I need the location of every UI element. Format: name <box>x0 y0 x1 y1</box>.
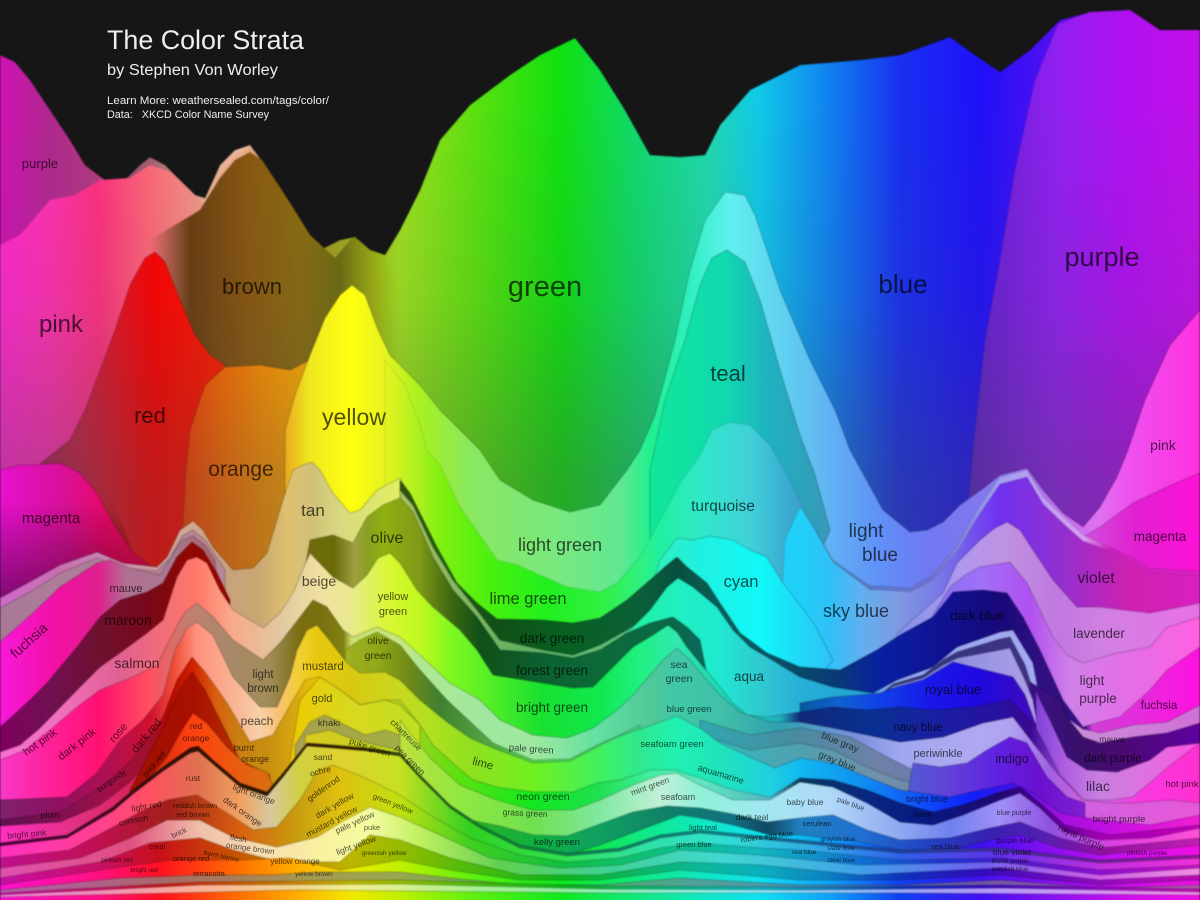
label: dark teal: dark teal <box>736 812 768 822</box>
label: orange of burnt orange: orange <box>241 754 269 764</box>
label: mauve right: mauve <box>1099 734 1125 744</box>
band: teal <box>650 250 830 600</box>
learn more line: Learn More: weathersealed.com/tags/color/ <box>107 95 330 107</box>
band: indigo <box>905 737 1085 830</box>
label: bright red: bright red <box>130 867 158 874</box>
label: robin's egg blue: robin's egg blue <box>740 829 793 844</box>
band: red <box>40 252 225 600</box>
band: orange <box>183 360 310 600</box>
label: seafoam: seafoam <box>661 792 695 802</box>
label: puke green: puke green <box>348 736 392 759</box>
label: crimson: crimson <box>118 812 149 828</box>
label: sand: sand <box>314 752 332 762</box>
band: dark rim line <box>0 743 1200 900</box>
label: rust: rust <box>186 773 201 783</box>
label: royal purple: royal purple <box>1056 822 1106 853</box>
label: light of light brown: light <box>252 669 274 681</box>
band: burnt orange, gold, neon green, navy <box>0 657 1200 900</box>
label: sea: sea <box>671 659 688 671</box>
label: bluish purple: bluish purple <box>992 858 1029 865</box>
label: lime green: lime green <box>489 590 567 608</box>
label: pinkish red: pinkish red <box>101 857 133 864</box>
label: pink: pink <box>39 311 84 338</box>
label: baby blue: baby blue <box>787 797 824 807</box>
label: reddish brown: reddish brown <box>173 803 217 810</box>
band: lilac <box>1036 690 1200 900</box>
label: green of yellow green: green <box>379 606 407 618</box>
label: brown of light brown: brown <box>247 683 279 695</box>
band: bright pink, crimson <box>0 720 195 880</box>
label: aquamarine: aquamarine <box>697 762 745 786</box>
label: brick red: brick red <box>141 750 167 779</box>
label: royal blue: royal blue <box>925 682 981 697</box>
label: purple right: purple <box>1064 242 1140 272</box>
label: pink right: pink <box>1150 437 1177 453</box>
label: dark red: dark red <box>129 717 164 755</box>
label: puke: puke <box>364 823 380 832</box>
label: turquoise: turquoise <box>691 498 755 515</box>
label: green of sea green: green <box>666 673 693 685</box>
band: kelly green, dark teal <box>400 770 1200 900</box>
label: magenta right: magenta <box>1134 529 1187 544</box>
label: aqua: aqua <box>734 669 765 684</box>
label: orange of red orange: orange <box>183 733 210 743</box>
band: orange red, yellow orange <box>0 858 1200 900</box>
band: yellow, light green, pale aqua and light blue <box>285 192 1200 900</box>
label: salmon: salmon <box>114 655 160 671</box>
label: maroon: maroon <box>104 612 152 628</box>
label: blue: blue <box>878 269 928 299</box>
label: ochre: ochre <box>309 764 332 779</box>
label: orange red: orange red <box>173 854 209 863</box>
data source line: Data: XKCD Color Name Survey <box>107 109 269 121</box>
label: fuchsia left: fuchsia <box>7 619 51 661</box>
label: brown: brown <box>222 274 282 299</box>
label: orange brown: orange brown <box>225 841 275 856</box>
label: purple blue: purple blue <box>996 836 1034 845</box>
label: blue under light: blue <box>862 545 898 566</box>
shade: magenta lower <box>0 500 170 700</box>
label: teal: teal <box>710 361 746 386</box>
label: olive: olive <box>371 530 404 547</box>
label: rose: rose <box>107 721 130 745</box>
band: olive and forest green <box>293 498 720 760</box>
label: grayish blue: grayish blue <box>820 836 856 843</box>
label: terracotta: terracotta <box>193 869 226 878</box>
band: dark orange, crimson, mustard yellow <box>0 765 1200 900</box>
label: navy: navy <box>913 809 933 819</box>
label: yellow: yellow <box>322 404 386 430</box>
byline: by Stephen Von Worley <box>107 62 278 79</box>
color name labels <box>7 156 1199 878</box>
title: The Color Strata <box>107 25 305 55</box>
label: peach: peach <box>241 714 273 728</box>
band: dark green and dark blue <box>400 480 1200 900</box>
label: blue purple: blue purple <box>997 810 1031 817</box>
label: goldenrod: goldenrod <box>305 773 342 803</box>
label: light orange: light orange <box>231 782 277 807</box>
label: light: light <box>849 521 884 542</box>
label: bright blue: bright blue <box>906 794 948 804</box>
label: tan: tan <box>301 501 325 520</box>
band: bottom vivid stratum <box>0 890 1200 900</box>
label: burnt: burnt <box>234 743 255 753</box>
label: olive of olive green: olive <box>367 635 389 647</box>
band: mauve right <box>1070 705 1200 780</box>
band: grey pink stripe <box>0 530 225 700</box>
label: pale yellow: pale yellow <box>334 809 377 836</box>
band: magenta right <box>1083 473 1200 600</box>
label: blue gray: blue gray <box>820 730 860 755</box>
label: green: green <box>508 271 582 303</box>
label: light green: light green <box>518 535 602 555</box>
band: puke green <box>305 730 420 810</box>
label: cerulean: cerulean <box>803 819 831 828</box>
label: purplish blue: purplish blue <box>992 866 1029 873</box>
band: khaki <box>295 715 420 800</box>
label: hot pink left: hot pink <box>21 726 60 759</box>
band: rust, light orange, light red <box>0 746 1200 900</box>
band: fuchsia and mauve left <box>0 536 225 760</box>
label: dark purple: dark purple <box>1084 753 1142 765</box>
label: fuchsia right: fuchsia <box>1141 700 1178 712</box>
band: hot pink, light brown, pale green, periwinkle <box>0 600 1200 900</box>
band: brown <box>150 152 400 600</box>
label: light teal: light teal <box>689 823 717 832</box>
band: salmon, beige, yellow green, bright green, navy blue <box>0 553 1200 900</box>
band: bottom mid stratum <box>0 880 1200 900</box>
label: gold: gold <box>312 693 332 705</box>
label: chartreuse: chartreuse <box>388 717 424 753</box>
label: green of olive green: green <box>365 650 392 662</box>
band: sky blue and violet <box>780 477 1200 900</box>
band: gray blue <box>700 735 990 810</box>
label: red brown: red brown <box>176 810 210 819</box>
label: dark green: dark green <box>520 631 584 646</box>
label: mustard: mustard <box>302 661 344 673</box>
label: magenta left: magenta <box>22 510 81 527</box>
title block <box>107 25 330 121</box>
label: green blue: green blue <box>676 840 712 849</box>
label: slate blue: slate blue <box>827 845 855 852</box>
label: sea blue left: sea blue <box>792 849 817 856</box>
band: pink <box>0 147 310 600</box>
label: dark pink: dark pink <box>56 726 99 763</box>
band: light teal <box>400 790 1200 900</box>
label: flesh: flesh <box>229 833 248 844</box>
label: plum: plum <box>41 810 59 820</box>
band: red orange <box>130 713 280 800</box>
band: olive green and dark rim of pale green <box>345 632 640 800</box>
label: dark orange: dark orange <box>221 794 264 829</box>
band: bottom pale stratum <box>0 884 1200 900</box>
band: pale stripe under dark green <box>400 490 700 760</box>
label: indigo: indigo <box>995 752 1029 766</box>
band: aqua <box>600 578 1040 800</box>
label: violet: violet <box>1077 570 1115 587</box>
label: sea blue: sea blue <box>931 842 959 851</box>
label: red of red orange: red <box>190 721 202 731</box>
band: terracotta <box>0 872 1200 900</box>
label: navy blue: navy blue <box>893 722 943 734</box>
band: pale periwinkle stripe <box>880 648 1040 800</box>
label: green yellow: green yellow <box>372 792 415 816</box>
label: pale green: pale green <box>508 742 554 757</box>
band: lime green and turquoise <box>385 360 1200 900</box>
band: dark purple <box>1030 682 1200 900</box>
label: lime: lime <box>471 756 495 773</box>
band: maroon <box>0 542 230 800</box>
label: cyan: cyan <box>724 573 758 591</box>
label: dark blue: dark blue <box>950 608 1004 623</box>
label: mint green: mint green <box>629 775 671 798</box>
label: orange: orange <box>208 458 274 481</box>
band: purple right <box>960 10 1200 600</box>
band: cyan <box>640 536 833 700</box>
band: lavender <box>897 522 1200 900</box>
label: kelly green: kelly green <box>534 837 580 848</box>
label: lavender: lavender <box>1073 626 1125 641</box>
band: peach, mustard, lime, bright blue <box>0 622 1200 900</box>
label: greenish yellow: greenish yellow <box>362 850 407 857</box>
label: bright green: bright green <box>516 700 588 715</box>
label: periwinkle: periwinkle <box>914 748 962 760</box>
label: beige: beige <box>302 573 336 589</box>
label: red: red <box>134 403 166 428</box>
label: khaki: khaki <box>318 718 340 729</box>
label: burgundy: burgundy <box>95 768 128 794</box>
label: brick: brick <box>170 825 188 840</box>
label: pale blue: pale blue <box>836 796 865 813</box>
band: tan and pale mauve <box>0 462 412 700</box>
label: purple of light purple: purple <box>1079 691 1117 706</box>
band: coral, orange brown <box>0 835 1200 900</box>
band: magenta left <box>0 463 170 700</box>
label: seafoam green: seafoam green <box>640 739 704 750</box>
label: sky blue: sky blue <box>823 601 889 621</box>
label: neon green: neon green <box>516 791 570 803</box>
band: royal blue <box>800 662 1036 800</box>
label: yellow orange: yellow orange <box>270 857 320 866</box>
label: light of light purple: light <box>1080 673 1105 688</box>
band: light purple <box>930 562 1200 900</box>
label: bright pink: bright pink <box>7 827 47 841</box>
label: light yellow: light yellow <box>335 833 378 857</box>
label: blue green: blue green <box>667 704 711 715</box>
label: grass green: grass green <box>502 807 548 819</box>
label: burnt sienna: burnt sienna <box>203 849 240 864</box>
label: steel blue: steel blue <box>827 857 855 864</box>
label: pea green: pea green <box>393 743 427 777</box>
label: mustard yellow: mustard yellow <box>304 803 360 839</box>
label: coral: coral <box>149 842 165 851</box>
label: purple left: purple <box>22 156 58 171</box>
band: dark slate stripe <box>880 637 1036 800</box>
label: blue violet: blue violet <box>993 847 1032 857</box>
label: lilac: lilac <box>1086 778 1110 794</box>
label: mauve: mauve <box>109 583 143 595</box>
label: hot pink right: hot pink <box>1165 779 1199 790</box>
label: yellow brown: yellow brown <box>295 871 333 878</box>
band: baby blue, grass green <box>400 720 1200 900</box>
label: forest green: forest green <box>516 663 588 678</box>
label: dark yellow: dark yellow <box>314 790 356 820</box>
label: pinkish purple: pinkish purple <box>1127 850 1167 857</box>
band: blue gray <box>700 720 1000 810</box>
label: gray blue: gray blue <box>817 749 857 774</box>
label: bright purple: bright purple <box>1093 814 1145 825</box>
band: flesh, pale yellow <box>0 807 1200 900</box>
band: gold <box>290 677 420 800</box>
band: dark red stripe <box>130 672 270 800</box>
label: light red: light red <box>131 798 163 814</box>
label: yellow: yellow <box>378 591 408 603</box>
